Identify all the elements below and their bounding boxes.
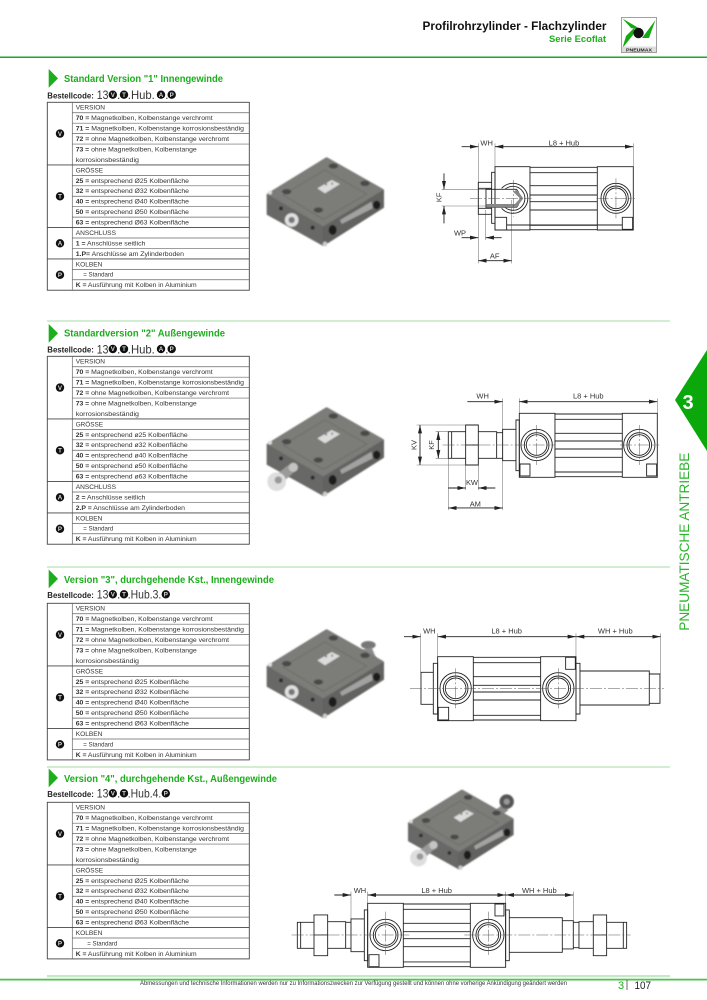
table: = Standard bbox=[83, 741, 114, 748]
order code bbox=[47, 787, 170, 801]
table: V bbox=[58, 831, 63, 838]
technical drawing 2: L8 + Hub bbox=[573, 391, 604, 400]
order code: P bbox=[170, 92, 174, 99]
table: V bbox=[58, 131, 63, 138]
table: = Standard bbox=[87, 940, 118, 947]
technical drawing 1: KF bbox=[435, 192, 444, 202]
table: 70 = Magnetkolben, Kolbenstange verchromt bbox=[76, 369, 213, 376]
table: korrosionsbeständig bbox=[76, 411, 139, 418]
order code: 13 bbox=[97, 342, 109, 356]
order code: T bbox=[122, 591, 126, 598]
technical drawing 3: L8 + Hub bbox=[491, 627, 522, 636]
side label: PNEUMATISCHE ANTRIEBE bbox=[676, 453, 692, 631]
table: 40 = entsprechend Ø40 Kolbenfläche bbox=[76, 700, 189, 707]
table: A bbox=[58, 240, 63, 248]
technical drawing 4: WH bbox=[354, 886, 366, 895]
product photo 4 bbox=[409, 791, 514, 870]
order code: V bbox=[111, 790, 116, 797]
table: K = Ausführung mit Kolben in Aluminium bbox=[76, 752, 197, 759]
table bbox=[47, 102, 249, 290]
table: VERSION bbox=[76, 805, 105, 812]
technical drawing 2: KV bbox=[409, 440, 418, 450]
heading: section 2: Standardversion "2" Außengewinde bbox=[64, 328, 225, 339]
footer note: Abmessungen und technische Informationen werden nur zu Informationszwecken zur Verfügung gestellt und können ohne vorherige Ankündigung geändert werden bbox=[140, 981, 567, 987]
page number bbox=[618, 980, 651, 992]
order code: P bbox=[164, 790, 168, 797]
table: 63 = entsprechend Ø63 Kolbenfläche bbox=[76, 720, 189, 727]
table: 63 = entsprechend Ø63 Kolbenfläche bbox=[76, 220, 189, 226]
order code: 13 bbox=[97, 88, 109, 102]
header subtitle: Serie Ecoflat bbox=[549, 34, 606, 44]
logo: Pneumax: PNEUMAX bbox=[626, 47, 653, 52]
table: = Standard bbox=[83, 272, 114, 279]
heading: section 1 bbox=[49, 69, 223, 88]
order code: . bbox=[117, 787, 120, 801]
table: 71 = Magnetkolben, Kolbenstange korrosionsbeständig bbox=[76, 380, 244, 387]
order code: T bbox=[122, 92, 126, 99]
table: VERSION bbox=[76, 606, 105, 613]
order code: A bbox=[159, 92, 164, 99]
table: 73 = ohne Magnetkolben, Kolbenstange bbox=[76, 400, 197, 407]
technical drawing 3 bbox=[404, 627, 664, 721]
table: T bbox=[58, 694, 62, 701]
technical drawing 4 bbox=[292, 886, 631, 967]
table: P bbox=[58, 940, 62, 947]
table: 32 = entsprechend Ø32 Kolbenfläche bbox=[76, 689, 189, 696]
order code: V bbox=[111, 346, 116, 353]
order code: . bbox=[117, 342, 120, 356]
table: T bbox=[58, 893, 62, 900]
table: 25 = entsprechend ø25 Kolbenfläche bbox=[76, 432, 188, 439]
table: V bbox=[58, 385, 63, 392]
panel: section 2 order table bbox=[47, 324, 249, 544]
product photo 3 bbox=[267, 631, 383, 718]
table: P bbox=[58, 741, 62, 748]
table: GRÖSSE bbox=[76, 866, 103, 874]
technical drawing 1: WH bbox=[480, 139, 493, 148]
heading: section 4 bbox=[49, 768, 277, 787]
table: 63 = entsprechend Ø63 Kolbenfläche bbox=[76, 919, 189, 926]
table: 73 = ohne Magnetkolben, Kolbenstange bbox=[76, 647, 197, 654]
order code: Bestellcode: bbox=[47, 91, 94, 100]
order code: A bbox=[159, 346, 164, 353]
technical drawing 4: WH + Hub bbox=[522, 886, 557, 895]
technical drawing 1: L8 + Hub bbox=[549, 139, 579, 148]
table: K = Ausführung mit Kolben in Aluminium bbox=[76, 951, 197, 958]
panel: section 3 order table bbox=[47, 570, 274, 760]
order code: V bbox=[111, 92, 116, 99]
table bbox=[47, 802, 249, 959]
technical drawing 1: WP bbox=[454, 229, 466, 238]
order code: 13 bbox=[97, 787, 109, 801]
table: 72 = ohne Magnetkolben, Kolbenstange verchromt bbox=[76, 136, 229, 143]
technical drawing 2: WH bbox=[476, 391, 489, 400]
heading: section 3: Version "3", durchgehende Kst., Innengewinde bbox=[64, 575, 274, 586]
order code: . bbox=[117, 88, 120, 102]
technical drawing 4: L8 + Hub bbox=[421, 886, 452, 895]
order code: T bbox=[122, 346, 126, 353]
table: ANSCHLUSS bbox=[76, 230, 116, 237]
table: 40 = entsprechend Ø40 Kolbenfläche bbox=[76, 199, 189, 206]
order code: . bbox=[165, 88, 168, 102]
table: 70 = Magnetkolben, Kolbenstange verchromt bbox=[76, 115, 213, 122]
table: 72 = ohne Magnetkolben, Kolbenstange verchromt bbox=[76, 637, 229, 644]
table: 32 = entsprechend Ø32 Kolbenfläche bbox=[76, 888, 189, 895]
table: = Standard bbox=[83, 526, 114, 533]
table: P bbox=[58, 272, 62, 279]
technical drawing 2: AM bbox=[470, 499, 481, 508]
table: korrosionsbeständig bbox=[76, 857, 139, 864]
heading: section 2 bbox=[49, 324, 225, 343]
table: 32 = entsprechend Ø32 Kolbenfläche bbox=[76, 188, 189, 195]
panel: section 1 order table bbox=[47, 69, 249, 290]
table: 25 = entsprechend Ø25 Kolbenfläche bbox=[76, 178, 189, 185]
header title: Profilrohrzylinder - Flachzylinder bbox=[422, 19, 607, 33]
technical drawing 2: KW bbox=[466, 478, 479, 487]
heading: section 3 bbox=[49, 570, 274, 588]
order code: P bbox=[170, 346, 174, 353]
order code: Bestellcode: bbox=[47, 346, 94, 355]
table: 25 = entsprechend Ø25 Kolbenfläche bbox=[76, 878, 189, 885]
table: K = Ausführung mit Kolben in Aluminium bbox=[76, 536, 197, 543]
side tab: chapter 3: 3 bbox=[682, 392, 694, 414]
table: T bbox=[58, 447, 62, 454]
order code: Bestellcode: bbox=[47, 591, 94, 600]
order code: .Hub. bbox=[128, 342, 155, 356]
table: 71 = Magnetkolben, Kolbenstange korrosionsbeständig bbox=[76, 826, 244, 833]
table: 32 = entsprechend ø32 Kolbenfläche bbox=[76, 442, 188, 449]
table: K = Ausführung mit Kolben in Aluminium bbox=[76, 282, 197, 289]
table: 1 = Anschlüsse seitlich bbox=[76, 240, 146, 247]
page number: 3 bbox=[618, 980, 624, 992]
table: GRÖSSE bbox=[76, 667, 103, 675]
table: 73 = ohne Magnetkolben, Kolbenstange bbox=[76, 846, 197, 853]
table: GRÖSSE bbox=[76, 420, 103, 428]
table: VERSION bbox=[76, 105, 105, 112]
product photo 2 bbox=[267, 409, 383, 496]
table: P bbox=[58, 526, 62, 533]
table: 72 = ohne Magnetkolben, Kolbenstange verchromt bbox=[76, 390, 229, 397]
order code bbox=[47, 342, 176, 356]
table: 50 = entsprechend ø50 Kolbenfläche bbox=[76, 463, 188, 470]
table: 2.P = Anschlüsse am Zylinderboden bbox=[76, 505, 185, 512]
table: VERSION bbox=[76, 359, 105, 366]
table bbox=[47, 603, 249, 760]
table: 25 = entsprechend Ø25 Kolbenfläche bbox=[76, 679, 189, 686]
logo: Pneumax bbox=[622, 18, 656, 52]
table: korrosionsbeständig bbox=[76, 157, 139, 164]
heading: section 1: Standard Version "1" Innengewinde bbox=[64, 74, 223, 85]
order code bbox=[47, 88, 176, 102]
table: 40 = entsprechend Ø40 Kolbenfläche bbox=[76, 899, 189, 906]
order code: .Hub.3. bbox=[128, 588, 161, 602]
table: 50 = entsprechend Ø50 Kolbenfläche bbox=[76, 909, 189, 916]
table: GRÖSSE bbox=[76, 166, 103, 174]
table: 40 = entsprechend ø40 Kolbenfläche bbox=[76, 453, 188, 460]
table: 73 = ohne Magnetkolben, Kolbenstange bbox=[76, 147, 197, 154]
order code: . bbox=[117, 588, 120, 602]
order code: V bbox=[111, 591, 116, 598]
technical drawing 1 bbox=[435, 139, 635, 263]
table: KOLBEN bbox=[76, 261, 103, 268]
order code: .Hub. bbox=[128, 88, 155, 102]
table: KOLBEN bbox=[76, 515, 103, 522]
table: 72 = ohne Magnetkolben, Kolbenstange verchromt bbox=[76, 836, 229, 843]
product photo 1 bbox=[267, 159, 383, 246]
table: 70 = Magnetkolben, Kolbenstange verchromt bbox=[76, 815, 213, 822]
order code: T bbox=[122, 790, 126, 797]
technical drawing 1: AF bbox=[490, 251, 500, 260]
technical drawing 3: WH + Hub bbox=[598, 627, 633, 636]
order code: .Hub.4. bbox=[128, 787, 161, 801]
table: 50 = entsprechend Ø50 Kolbenfläche bbox=[76, 209, 189, 216]
technical drawing 3: WH bbox=[423, 627, 436, 636]
table: ANSCHLUSS bbox=[76, 484, 116, 491]
order code: 13 bbox=[97, 588, 109, 602]
order code bbox=[47, 588, 170, 602]
table: 1.P= Anschlüsse am Zylinderboden bbox=[76, 251, 184, 258]
table: T bbox=[58, 194, 62, 200]
heading: section 4: Version "4", durchgehende Kst., Außengewinde bbox=[64, 774, 277, 785]
table: 71 = Magnetkolben, Kolbenstange korrosionsbeständig bbox=[76, 126, 244, 133]
table: KOLBEN bbox=[76, 930, 103, 937]
order code: P bbox=[164, 591, 168, 598]
technical drawing 2: KF bbox=[427, 440, 436, 450]
technical drawing 2 bbox=[409, 391, 659, 510]
table bbox=[47, 356, 249, 544]
table: A bbox=[58, 494, 63, 501]
order code: . bbox=[165, 342, 168, 356]
table: V bbox=[58, 632, 63, 639]
table: korrosionsbeständig bbox=[76, 658, 139, 665]
table: 50 = entsprechend Ø50 Kolbenfläche bbox=[76, 710, 189, 717]
page number: 107 bbox=[634, 980, 651, 992]
table: 63 = entsprechend ø63 Kolbenfläche bbox=[76, 473, 188, 480]
table: 71 = Magnetkolben, Kolbenstange korrosionsbeständig bbox=[76, 627, 244, 634]
side tab: chapter 3 bbox=[675, 350, 707, 451]
panel: section 4 order table bbox=[47, 768, 277, 959]
order code: Bestellcode: bbox=[47, 790, 94, 799]
table: 70 = Magnetkolben, Kolbenstange verchromt bbox=[76, 616, 213, 623]
table: 2 = Anschlüsse seitlich bbox=[76, 494, 146, 501]
table: KOLBEN bbox=[76, 731, 103, 738]
